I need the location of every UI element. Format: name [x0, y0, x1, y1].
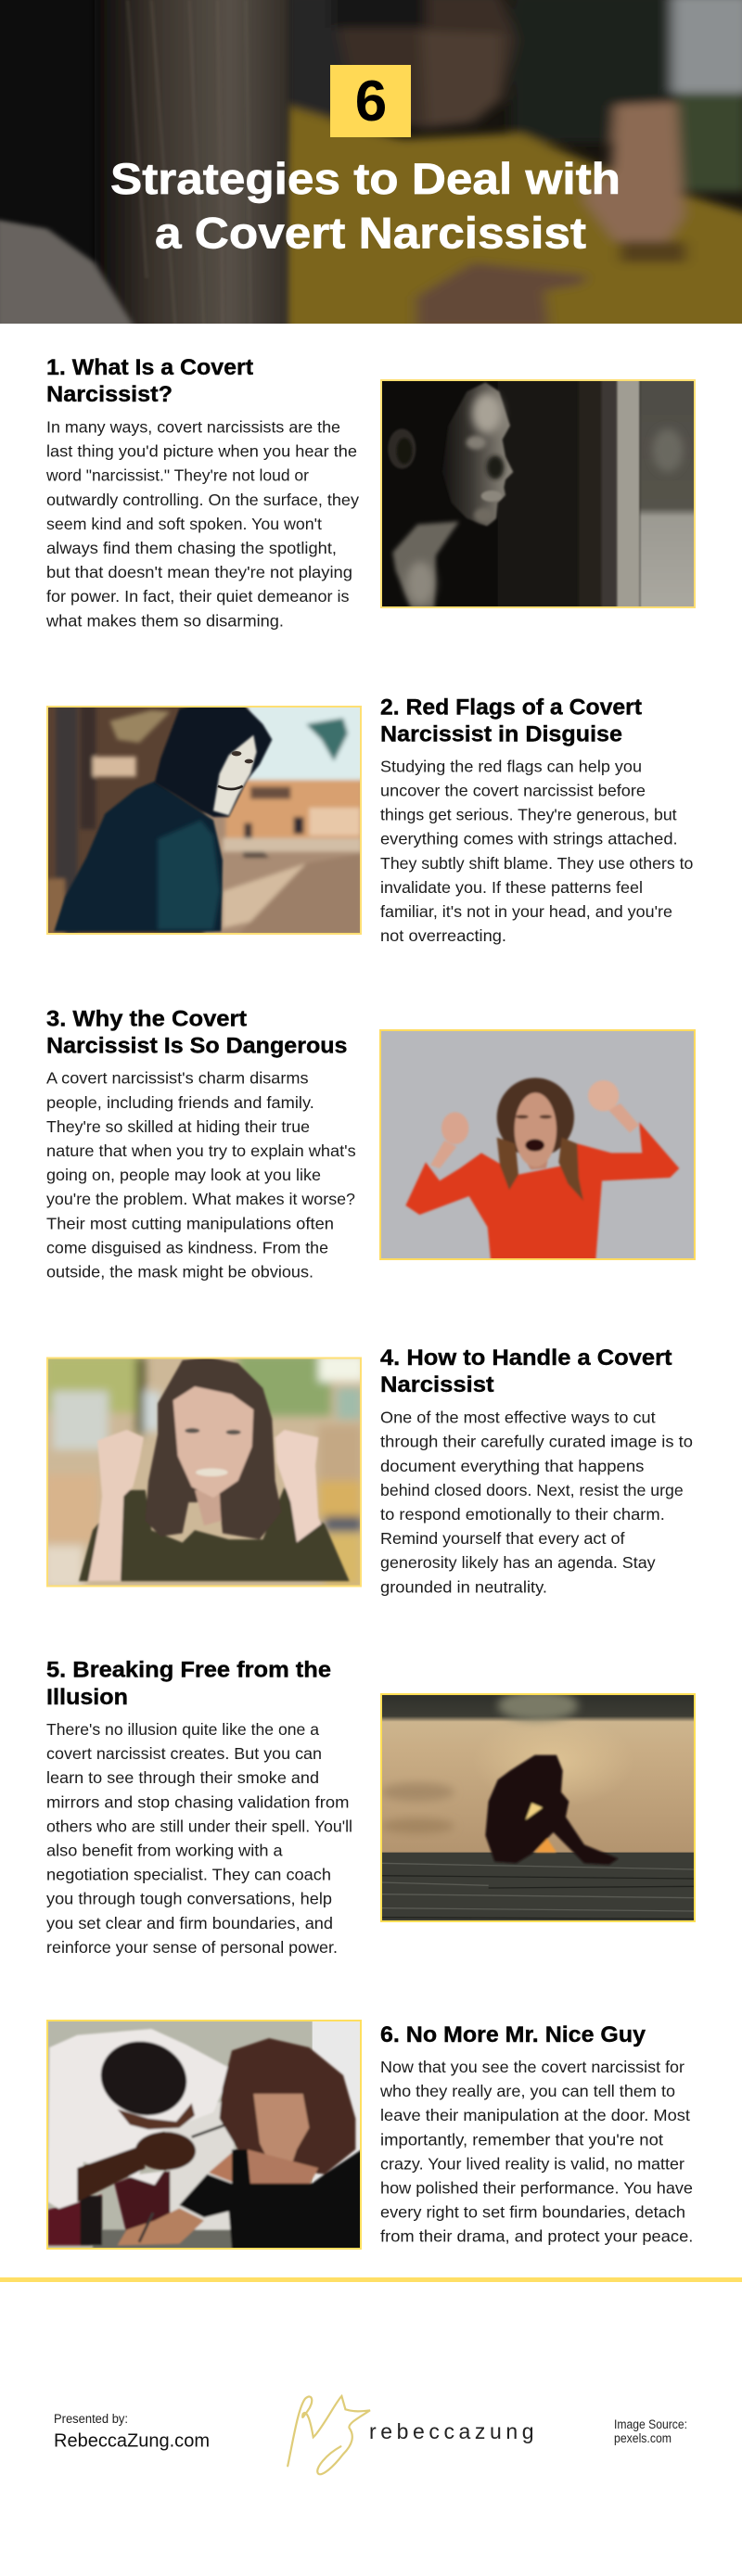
text block: section 4: through their carefully curated image is to — [380, 1433, 693, 1451]
text block: section 4: document everything that happens — [380, 1457, 645, 1475]
text block: section 5 — [46, 1720, 352, 1957]
text block: section 3 — [46, 1069, 356, 1282]
text block: section 5: covert narcissist creates. But you can — [46, 1744, 322, 1763]
heading: section 2: Narcissist in Disguise — [380, 721, 622, 747]
logo: rebeccazung signature: rebeccazung — [369, 2419, 534, 2443]
photo: hooded figure with mask — [44, 703, 365, 937]
text block: section 2: not overreacting. — [380, 926, 506, 945]
text block: section 6: leave their manipulation at the door. Most — [380, 2106, 690, 2124]
title — [110, 154, 620, 258]
title: a Covert Narcissist — [155, 208, 586, 258]
image source credit: pexels.com — [614, 2431, 672, 2445]
presented by: Presented by: — [54, 2412, 128, 2426]
text block: section 6: importantly, remember that you're not — [380, 2130, 663, 2149]
text block: section 6 — [379, 2058, 693, 2246]
text block: section 2: everything comes with strings attached. — [380, 830, 678, 848]
text block: section 1: word "narcissist." They're not loud or — [45, 466, 309, 485]
heading: section 2 — [380, 695, 642, 747]
heading: section 5: 5. Breaking Free from the — [46, 1658, 331, 1683]
divider: yellow rule above footer — [0, 2277, 742, 2282]
text block: section 2: invalidate you. If these patterns feel — [380, 878, 643, 897]
title: Strategies to Deal with — [110, 154, 620, 203]
text block: section 1: but that doesn't mean they're not playing — [46, 563, 352, 581]
hero background photo — [0, 0, 742, 334]
heading: section 4 — [380, 1345, 672, 1397]
heading: section 4: 4. How to Handle a Covert — [380, 1345, 672, 1371]
text block: section 6: crazy. Your lived reality is valid, no matter — [380, 2154, 684, 2173]
text block: section 6: every right to set firm boundaries, detach — [380, 2203, 685, 2222]
text block: section 5: There's no illusion quite like the one a — [46, 1720, 319, 1739]
panel: section 2 — [44, 695, 693, 945]
text block: section 1: outwardly controlling. On the surface, they — [46, 491, 359, 509]
text block: section 3: A covert narcissist's charm disarms — [46, 1069, 309, 1088]
text block: section 3: going on, people may look at you like — [46, 1166, 321, 1184]
text block: section 2 — [380, 757, 693, 945]
presented by — [54, 2412, 210, 2452]
heading: section 3 — [46, 1006, 347, 1059]
text block: section 5: you set clear and firm boundaries, and — [46, 1914, 333, 1932]
text block: section 2: familiar, it's not in your head, and you're — [380, 902, 672, 921]
heading: section 5 — [46, 1658, 331, 1710]
presented by: RebeccaZung.com — [54, 2430, 210, 2452]
text block: section 6: how polished their performance. You have — [380, 2179, 693, 2198]
panel: section 3 — [46, 1006, 697, 1282]
text block: section 5: you through tough conversations, help — [46, 1890, 332, 1908]
text block: section 6: Now that you see the covert narcissist for — [380, 2058, 684, 2076]
text block: section 2: uncover the covert narcissist before — [380, 781, 646, 799]
photo: man whispering to woman writing — [46, 2020, 362, 2250]
panel: section 5 — [46, 1658, 696, 1957]
text block: section 6: who they really are, you can tell them to — [379, 2082, 675, 2100]
text block: section 4: generosity likely has an agenda. Stay — [380, 1553, 656, 1572]
heading: section 1: 1. What Is a Covert — [46, 355, 253, 380]
photo: woman in red shouting — [379, 1029, 697, 1261]
text block: section 4 — [380, 1409, 693, 1596]
text block: section 3: come disguised as kindness. From the — [46, 1238, 328, 1256]
text block: section 1: seem kind and soft spoken. You won't — [46, 515, 322, 533]
text block: section 1: last thing you'd picture when you hear the — [46, 442, 357, 461]
icon: gold signature monogram — [288, 2396, 370, 2474]
heading: section 3: Narcissist Is So Dangerous — [46, 1033, 347, 1059]
text block: section 4: One of the most effective ways to cut — [380, 1409, 656, 1427]
heading: section 5: Illusion — [46, 1685, 128, 1710]
image source credit: Image Source: — [614, 2417, 687, 2431]
text block: section 5: learn to see through their smoke and — [46, 1768, 319, 1787]
text block: section 2: things get serious. They're generous, but — [380, 806, 677, 824]
text block: section 2: Studying the red flags can help you — [380, 757, 642, 775]
text block: section 3: outside, the mask might be obvious. — [46, 1263, 313, 1282]
heading: section 6: 6. No More Mr. Nice Guy — [380, 2022, 646, 2047]
text block: section 3: you're the problem. What makes it worse? — [46, 1190, 355, 1208]
heading: section 1: Narcissist? — [46, 382, 173, 407]
text block: section 3: They're so skilled at hiding their true — [46, 1117, 310, 1136]
photo: man in profile by window — [380, 379, 696, 608]
text block: section 2: They subtly shift blame. They use others to — [380, 854, 693, 873]
panel: section 6 — [46, 2020, 693, 2250]
text block: section 5: others who are still under their spell. You'll — [46, 1817, 352, 1835]
text block: section 4: to respond emotionally to their charm. — [380, 1505, 665, 1524]
text block: section 4: Remind yourself that every act of — [380, 1529, 625, 1548]
text block: section 1: for power. In fact, their quiet demeanor is — [46, 587, 350, 606]
heading: section 2: 2. Red Flags of a Covert — [380, 695, 642, 720]
photo: angry woman with clenched fists — [44, 1354, 365, 1588]
panel: hero header — [0, 0, 742, 334]
text block: section 4: behind closed doors. Next, resist the urge — [380, 1481, 684, 1499]
text block: section 3: Their most cutting manipulations often — [46, 1214, 334, 1232]
heading: section 3: 3. Why the Covert — [46, 1006, 247, 1031]
text block: section 1 — [45, 417, 359, 630]
text block: section 5: mirrors and stop chasing validation from — [46, 1792, 349, 1811]
text block: section 1: what makes them so disarming. — [45, 611, 284, 630]
image source credit — [614, 2417, 687, 2445]
text block: section 5: also benefit from working with a — [46, 1842, 283, 1860]
text block: section 3: nature that when you try to explain what's — [46, 1141, 356, 1160]
panel: footer — [54, 2396, 687, 2474]
logo: rebeccazung signature — [288, 2396, 534, 2474]
text block: section 5: negotiation specialist. They can coach — [46, 1866, 331, 1884]
heading: section 4: Narcissist — [380, 1372, 494, 1397]
number badge: 6 — [355, 70, 387, 134]
panel: section 1 — [45, 355, 696, 630]
text block: section 4: grounded in neutrality. — [380, 1577, 547, 1596]
panel: section 4 — [44, 1345, 693, 1596]
text block: section 5: reinforce your sense of personal power. — [46, 1938, 338, 1957]
photo: silhouette sitting on dock at sunset — [380, 1690, 696, 1922]
text block: section 3: people, including friends and family. — [46, 1093, 314, 1112]
number badge — [330, 65, 411, 137]
heading: section 1 — [46, 355, 253, 407]
text block: section 1: always find them chasing the spotlight, — [46, 539, 337, 557]
text block: section 1: In many ways, covert narcissists are the — [46, 417, 340, 436]
text block: section 6: from their drama, and protect your peace. — [380, 2227, 693, 2246]
